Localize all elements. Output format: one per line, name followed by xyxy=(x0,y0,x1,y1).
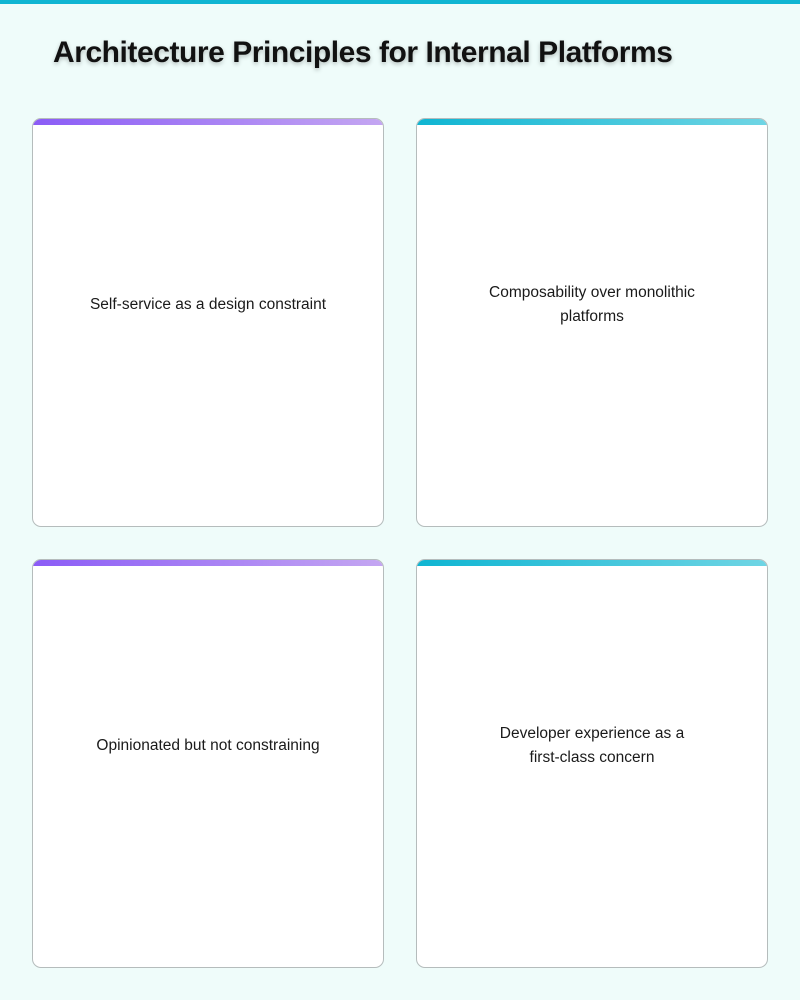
top bar xyxy=(0,0,800,4)
accent bar cyan xyxy=(417,560,767,566)
text: composability: Composability over monolithic platforms xyxy=(489,284,695,324)
panel: self-service xyxy=(32,118,384,527)
panel: composability xyxy=(416,118,768,527)
accent bar purple xyxy=(33,119,383,125)
title: Architecture Principles for Internal Platforms xyxy=(53,36,672,69)
text: opinionated: Opinionated but not constraining xyxy=(96,736,320,754)
panel: opinionated xyxy=(32,559,384,968)
accent bar cyan xyxy=(417,119,767,125)
text: self-service: Self-service as a design constraint xyxy=(90,296,326,312)
panel: developer experience xyxy=(416,559,768,968)
text: developer experience: Developer experience as a first-class concern xyxy=(500,724,684,766)
accent bar purple xyxy=(33,560,383,566)
